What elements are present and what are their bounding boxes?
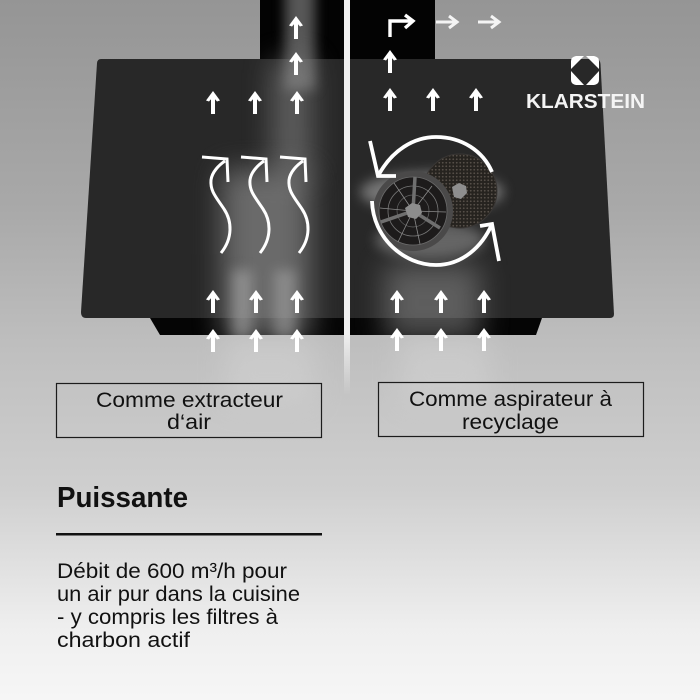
arrows: extractor airflow — [206, 16, 304, 352]
body text — [57, 559, 300, 652]
center divider — [344, 0, 350, 395]
label box: recirculation: Comme aspirateur à — [409, 387, 612, 411]
bent outlet arrow — [390, 15, 499, 37]
label box: extractor: d‘air — [167, 410, 211, 434]
body text: - y compris les filtres à — [57, 605, 278, 629]
body text: charbon actif — [57, 628, 190, 652]
circular arrows — [370, 137, 499, 265]
label box: recirculation — [378, 382, 644, 436]
range hood illustration — [81, 0, 614, 335]
heading: Puissante — [57, 482, 188, 514]
body text: un air pur dans la cuisine — [57, 582, 300, 606]
label box: recirculation: recyclage — [462, 410, 559, 434]
smoke: extractor side — [222, 0, 315, 340]
arrows: recirculation airflow — [383, 50, 491, 351]
logo wordmark: KLARSTEIN — [526, 90, 645, 113]
logo mark — [571, 56, 599, 85]
charcoal filter: front disc — [373, 171, 453, 251]
label box: extractor — [56, 384, 322, 438]
wavy arrows — [202, 157, 308, 253]
smoke: recirculation side — [360, 172, 504, 340]
smoke below the hood — [225, 335, 490, 405]
hood body — [81, 59, 614, 318]
chimney — [260, 0, 435, 60]
logo: Klarstein — [526, 56, 645, 113]
heading rule — [56, 533, 322, 536]
label box: extractor: Comme extracteur — [96, 388, 283, 412]
charcoal filter: back mesh disc — [423, 154, 497, 228]
hood lower strip — [150, 318, 542, 335]
body text: Débit de 600 m³/h pour — [57, 559, 287, 583]
